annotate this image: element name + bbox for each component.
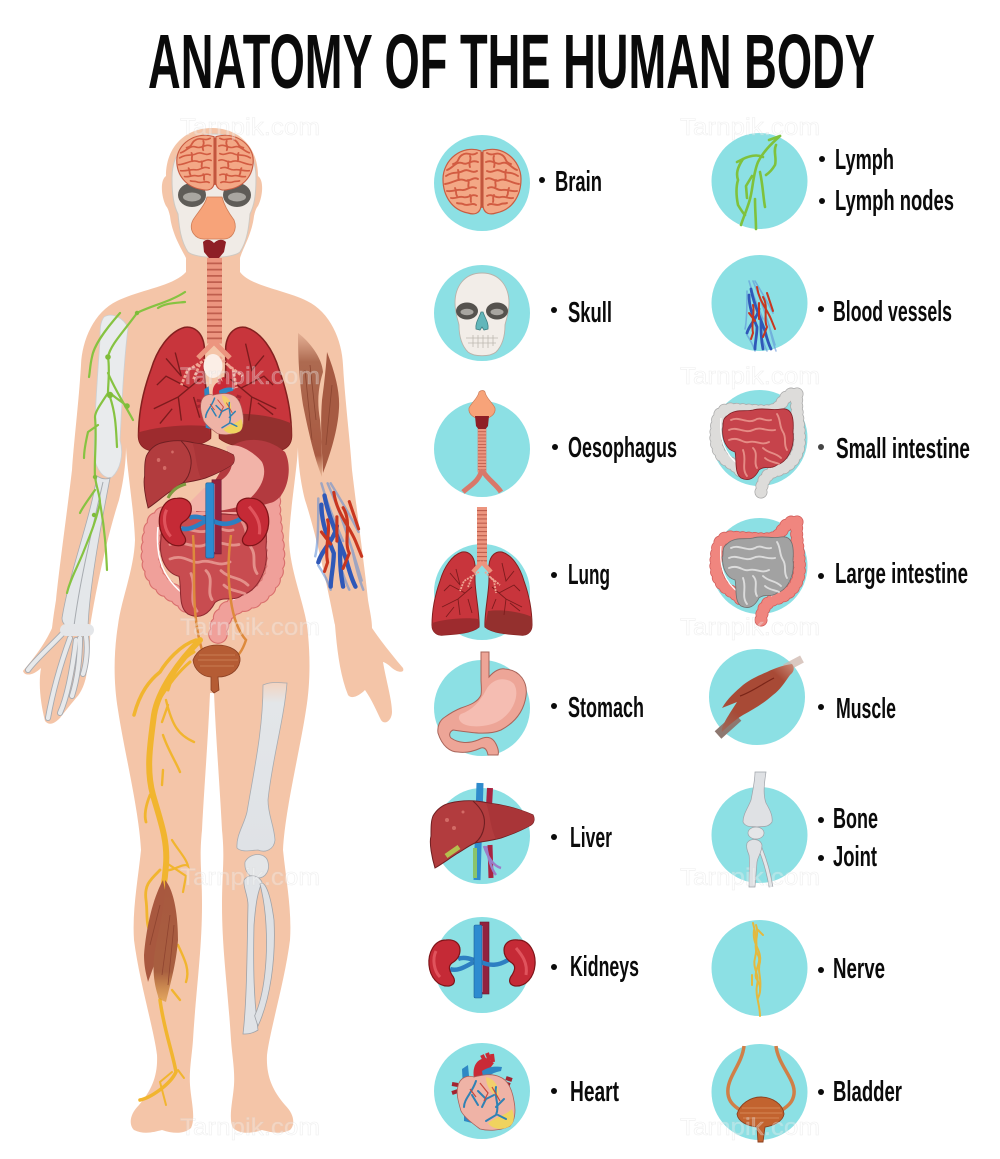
label: lymph nodes xyxy=(819,185,954,217)
bronchi xyxy=(198,342,230,358)
label: nerve xyxy=(818,953,885,985)
label: bladder xyxy=(818,1076,902,1108)
label: lung: Lung xyxy=(568,559,610,591)
label: stomach: Stomach xyxy=(568,692,644,724)
icon: small intestine xyxy=(712,390,808,492)
legend item: large intestine xyxy=(712,518,968,620)
right forearm blood vessels xyxy=(315,483,363,590)
gallbladder xyxy=(168,484,186,498)
label: nerve: Nerve xyxy=(833,953,885,985)
icon: heart xyxy=(434,1043,530,1139)
icon: lung xyxy=(432,507,532,640)
left arm bones xyxy=(62,315,128,628)
icon: oesophagus xyxy=(434,390,530,497)
watermarks: Tarnpik.com xyxy=(180,363,320,390)
icon: bladder xyxy=(712,1044,808,1142)
legend item: bladder xyxy=(712,1044,902,1142)
label: skull: Skull xyxy=(568,297,612,329)
body silhouette xyxy=(23,128,403,1133)
large and small intestine xyxy=(150,492,276,634)
legend item: kidneys xyxy=(429,917,639,1013)
legend item: lung xyxy=(432,507,610,640)
right arm muscle xyxy=(298,333,339,477)
watermarks xyxy=(180,114,820,1141)
label: oesophagus: Oesophagus xyxy=(568,432,677,464)
stomach in body xyxy=(196,440,289,512)
icon: skull xyxy=(434,265,530,361)
ureters xyxy=(193,535,246,660)
calf muscle xyxy=(144,880,178,1002)
legend item: lymph xyxy=(712,133,954,229)
icon: bone xyxy=(712,772,808,887)
label: brain xyxy=(539,166,602,198)
lungs xyxy=(138,327,292,450)
bladder xyxy=(193,645,240,693)
left leg bone xyxy=(237,682,287,1034)
heart notch xyxy=(204,354,222,378)
sciatic nerve xyxy=(134,640,200,1105)
icon: stomach xyxy=(434,652,530,756)
legend item: heart xyxy=(434,1043,619,1139)
watermarks: Tarnpik.com xyxy=(180,1114,320,1141)
heart in chest xyxy=(197,377,243,435)
label: bone: Bone xyxy=(833,803,878,835)
icon: brain xyxy=(434,135,530,231)
legend item: blood vessels xyxy=(712,255,952,351)
lymph nodes xyxy=(92,311,139,517)
label: heart xyxy=(551,1076,619,1108)
label: muscle xyxy=(818,693,896,725)
watermarks: Tarnpik.com xyxy=(180,614,320,641)
legend item: oesophagus xyxy=(434,390,677,497)
label: lung xyxy=(551,559,610,591)
kidneys and vessels xyxy=(159,480,269,558)
label: stomach xyxy=(551,692,644,724)
label: brain: Brain xyxy=(555,166,602,198)
label: joint: Joint xyxy=(833,841,877,873)
legend item: stomach xyxy=(434,652,644,756)
watermarks: Tarnpik.com xyxy=(680,864,820,891)
skull in head xyxy=(172,134,256,257)
watermarks: Tarnpik.com xyxy=(680,363,820,390)
icon: kidneys xyxy=(429,917,535,1013)
nasal cavity xyxy=(191,197,235,239)
label: joint xyxy=(818,841,877,873)
legend item: small intestine xyxy=(712,390,970,492)
liver in body xyxy=(144,441,234,508)
label: lymph xyxy=(819,144,894,176)
icon: large intestine xyxy=(712,518,808,620)
legend item: liver xyxy=(430,783,612,884)
legend item: skull xyxy=(434,265,612,361)
lymph vessels xyxy=(67,292,185,593)
watermarks: Tarnpik.com xyxy=(180,114,320,141)
icon: lymph xyxy=(712,133,808,229)
legend item: muscle xyxy=(709,649,896,745)
watermarks: Tarnpik.com xyxy=(180,864,320,891)
label: oesophagus xyxy=(552,432,677,464)
hand bones xyxy=(28,630,88,718)
icon: liver xyxy=(430,783,534,884)
label: bladder: Bladder xyxy=(833,1076,902,1108)
icon: muscle xyxy=(709,649,805,745)
trachea xyxy=(214,258,216,343)
label: kidneys xyxy=(551,951,639,983)
brain xyxy=(177,135,253,190)
label: lymph: Lymph xyxy=(835,144,894,176)
label: kidneys: Kidneys xyxy=(570,951,639,983)
human body figure xyxy=(23,128,403,1133)
watermarks: Tarnpik.com xyxy=(680,614,820,641)
icon: nerve xyxy=(712,920,808,1016)
watermarks: Tarnpik.com xyxy=(680,1114,820,1141)
legend item: bone and joint xyxy=(712,772,878,887)
label: liver: Liver xyxy=(570,822,612,854)
label: skull xyxy=(551,297,612,329)
larynx xyxy=(203,240,226,258)
label: muscle: Muscle xyxy=(836,693,896,725)
legend item: nerve xyxy=(712,920,885,1016)
legend item: brain xyxy=(434,135,602,231)
label: liver xyxy=(551,822,612,854)
label: heart: Heart xyxy=(570,1076,619,1108)
label: bone xyxy=(818,803,878,835)
watermarks: Tarnpik.com xyxy=(680,114,820,141)
icon: blood vessels xyxy=(712,255,808,351)
label: blood vessels xyxy=(818,296,952,328)
